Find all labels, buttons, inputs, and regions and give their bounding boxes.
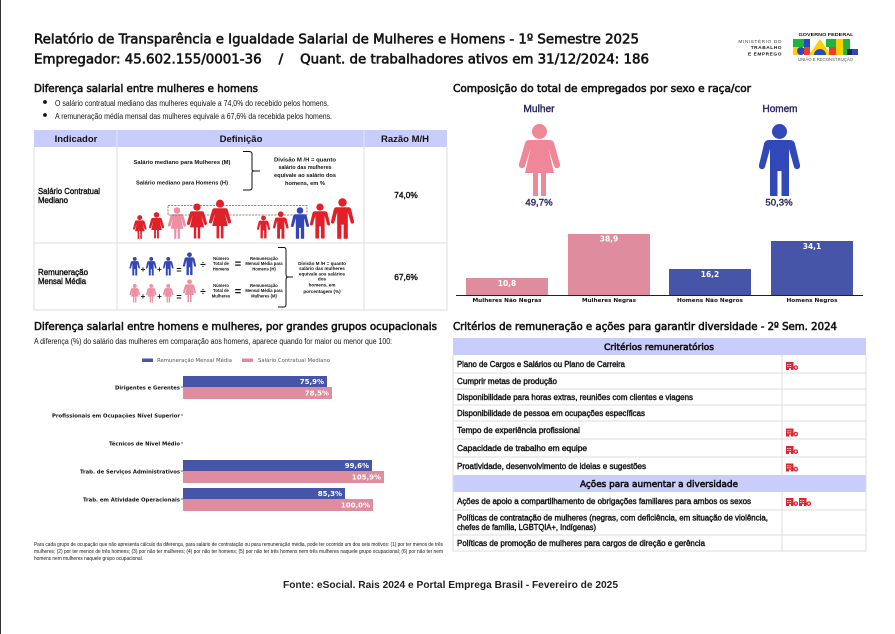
table: critérios e ações: Disponibilidade para horas extras, reuniões com clientes e viagens xyxy=(457,393,693,402)
table: critérios e ações: Políticas de contratação de mulheres (negras, com deficiência, em situação de violência, xyxy=(457,514,768,522)
icon: homem 50,3%: Homem xyxy=(762,104,798,115)
row: remuneração mensal média: homens, em xyxy=(309,282,335,288)
row: salário contratual mediano: 74,0% xyxy=(394,190,418,200)
bar chart: sexo e raça/cor: Mulheres Negras xyxy=(582,298,637,304)
logo: governo federal brasil: UNIÃO E RECONSTRUÇÃO xyxy=(798,57,854,62)
formula: homens: = xyxy=(235,258,241,270)
bar chart: grupos ocupacionais: Técnicos de Nível Médio xyxy=(109,440,180,448)
table: critérios e ações: Disponibilidade de pessoa em ocupações específicas xyxy=(457,409,645,418)
icon: mulher 49,7% xyxy=(519,104,560,208)
bullet list: O salário contratual mediano das mulheres equivale a 74,0% do recebido pelos homens. xyxy=(55,99,329,108)
bar chart: grupos ocupacionais: Trab. de Serviços Administrativos xyxy=(80,470,181,476)
heading: grupos ocupacionais: Diferença salarial entre homens e mulheres, por grandes grupos ocupacionais xyxy=(34,321,437,333)
table: critérios e ações: Proatividade, desenvolvimento de ideias e sugestões xyxy=(457,462,646,471)
row: remuneração mensal média: equivale aos salários xyxy=(299,272,346,276)
bar chart: grupos ocupacionais: 75,9% xyxy=(300,378,324,386)
bar chart: grupos ocupacionais: 85,3% xyxy=(318,490,342,498)
bar chart: sexo e raça/cor: Mulheres Não Negras xyxy=(472,298,542,304)
title: Empregador: 45.602.155/0001-36 / Quant. de trabalhadores ativos em 31/12/2024: 186 xyxy=(34,52,649,68)
bar chart: grupos ocupacionais: 78,5% xyxy=(305,390,329,398)
legend: Salário Contratual Mediano xyxy=(258,357,331,364)
row: salário contratual mediano: Salário mediano para Homens (H) xyxy=(136,180,228,186)
icons: marcadores de empresa xyxy=(786,362,810,506)
formula: mulheres xyxy=(129,279,283,302)
bar chart: grupos ocupacionais: Dirigentes e Gerentes xyxy=(115,386,181,392)
heading: critérios: Critérios de remuneração e ações para garantir diversidade - 2º Sem. 2024 xyxy=(453,321,837,333)
icon: homem 50,3% xyxy=(759,104,800,208)
bar chart: sexo e raça/cor: 38,9 xyxy=(600,234,618,244)
formula: mulheres: = xyxy=(176,292,182,302)
formula: mulheres: Remuneração xyxy=(250,283,278,288)
row: salário contratual mediano: homens, em % xyxy=(285,181,325,187)
bar chart: sexo e raça/cor: 16,2 xyxy=(701,270,719,279)
formula: homens: Total de xyxy=(213,261,230,266)
logo: ministério: MINISTÉRIO DO xyxy=(738,38,782,45)
bar chart: sexo e raça/cor: 34,1 xyxy=(803,242,821,251)
title: Relatório de Transparência e Igualdade Salarial de Mulheres e Homens - 1º Semestre 2025 xyxy=(34,32,639,48)
formula: homens: Homens (H) xyxy=(252,266,276,272)
row: remuneração mensal média: 67,6% xyxy=(394,272,418,282)
table: critérios e ações: Capacidade de trabalho em equipe xyxy=(457,444,588,453)
bullet list xyxy=(43,99,332,121)
formula: mulheres: Mulheres xyxy=(212,294,231,298)
formula: homens: Mensal Média para xyxy=(245,261,283,266)
table: critérios e ações: Cumprir metas de produção xyxy=(457,377,558,386)
table: indicadores xyxy=(34,130,447,310)
table: critérios e ações: Ações para aumentar a diversidade xyxy=(580,480,738,490)
row: remuneração mensal média: porcentagem (%) xyxy=(303,289,341,294)
footnote: mulheres; (2) por ter menos de três homens; (3) por não ter mulheres; (4) por não ter homens; (5) por não ter três homens nem três mulheres naquele grupo ocupacional; (6) por não ter nem xyxy=(34,549,443,555)
table: critérios e ações: Plano de Cargos e Salários ou Plano de Carreira xyxy=(457,360,626,369)
formula: mulheres: Mulheres (M) xyxy=(251,294,278,298)
footnote: homens nem mulheres naquele grupo ocupacional. xyxy=(34,556,143,562)
bar chart: sexo e raça/cor: Homens Não Negros xyxy=(677,298,744,304)
logo: governo federal brasil xyxy=(793,32,858,62)
row: salário contratual mediano: salário das mulheres xyxy=(278,165,332,171)
row: salário contratual mediano: Salário mediano para Mulheres (M) xyxy=(134,160,231,166)
title xyxy=(34,32,649,68)
heading: diferença salarial: Diferença salarial entre mulheres e homens xyxy=(34,83,258,95)
formula: homens: Homens xyxy=(213,266,230,272)
formula: homens xyxy=(129,252,283,275)
formula: mulheres: Total de xyxy=(213,288,230,293)
formula: mulheres: + xyxy=(141,292,146,301)
formula: homens: + xyxy=(157,265,162,274)
formula: homens: Remuneração xyxy=(250,256,278,261)
icon: mulher 49,7%: 49,7% xyxy=(525,198,553,208)
logo: ministério: TRABALHO xyxy=(751,45,782,51)
row: remuneração mensal média xyxy=(38,248,418,307)
icons: homens xyxy=(257,198,354,239)
bullet list: A remuneração média mensal das mulheres equivale a 67,6% da recebida pelos homens. xyxy=(55,112,332,121)
table: critérios e ações xyxy=(453,338,866,551)
legend xyxy=(142,357,331,364)
table: critérios e ações: Ações de apoio a compartilhamento de obrigações familiares para ambos os sexos xyxy=(457,497,751,506)
table: critérios e ações: Políticas de promoção de mulheres para cargos de direção e gerência xyxy=(457,539,706,548)
legend: Remuneração Mensal Média xyxy=(157,357,232,364)
row: salário contratual mediano: Salário Contratual xyxy=(38,186,100,196)
table: critérios e ações: chefes de família, LGBTQIA+, Indígenas) xyxy=(457,523,596,532)
row: remuneração mensal média: Divisão M /H = quanto xyxy=(298,261,346,266)
table: indicadores: Definição xyxy=(220,134,263,145)
table: critérios e ações: Tempo de experiência profissional xyxy=(457,426,580,435)
row: salário contratual mediano: Mediano xyxy=(38,195,68,205)
row: salário contratual mediano: equivale ao salário dos xyxy=(274,173,336,179)
icon: mulher 49,7%: Mulher xyxy=(523,104,555,115)
formula: homens: Número xyxy=(213,256,229,261)
logo: ministério: E EMPREGO xyxy=(748,52,782,58)
logo: ministério xyxy=(738,38,782,58)
heading: composição: Composição do total de empregados por sexo e raça/cor xyxy=(453,83,752,95)
bar chart: grupos ocupacionais: Trab. em Atividade Operacionais xyxy=(83,498,181,504)
logo: governo federal brasil: GOVERNO FEDERAL xyxy=(798,32,854,37)
bar chart: grupos ocupacionais: 105,9% xyxy=(352,474,381,482)
row: salário contratual mediano: Divisão M /H = quanto xyxy=(274,158,337,164)
bar chart: grupos ocupacionais: 99,6% xyxy=(345,462,369,470)
row: remuneração mensal média: Remuneração xyxy=(38,267,88,277)
icon: homem 50,3%: 50,3% xyxy=(765,198,793,208)
row: salário contratual mediano xyxy=(38,152,418,239)
icons: mulheres xyxy=(133,200,231,239)
table: critérios e ações: Critérios remuneratórios xyxy=(604,342,714,353)
bar chart: sexo e raça/cor xyxy=(456,234,863,304)
bar chart: grupos ocupacionais: Profissionais em Ocupações Nível Superior xyxy=(52,412,180,420)
formula: mulheres: ÷ xyxy=(200,287,206,298)
subtitle: grupos ocupacionais: A diferença (%) do salário das mulheres em comparação aos homens, aparece quando for maior ou menor que 100: xyxy=(34,337,392,346)
bar chart: sexo e raça/cor: 10,8 xyxy=(498,279,516,288)
formula: mulheres: + xyxy=(157,292,162,301)
row: remuneração mensal média: Mensal Média xyxy=(38,276,86,286)
footnote xyxy=(34,542,443,562)
formula: homens: + xyxy=(141,265,146,274)
formula: homens: ÷ xyxy=(200,260,206,271)
row: remuneração mensal média: salário das mulheres xyxy=(299,266,345,271)
formula: homens: = xyxy=(176,265,182,275)
bar chart: grupos ocupacionais: 100,0% xyxy=(341,502,370,510)
row: remuneração mensal média: dos xyxy=(318,276,327,282)
formula: mulheres: = xyxy=(235,286,241,298)
source note: Fonte: eSocial. Rais 2024 e Portal Emprega Brasil - Fevereiro de 2025 xyxy=(283,580,618,591)
table: indicadores: Razão M/H xyxy=(381,134,429,145)
footnote: Para cada grupo de ocupação que não apresenta cálculo da diferença, para salário de contratação ou para remuneração média, pode ter ocorrido um dos seis motivos: (1) por ter menos de três xyxy=(34,542,443,548)
formula: mulheres: Número xyxy=(213,283,229,288)
table: indicadores: Indicador xyxy=(55,134,98,145)
bar chart: grupos ocupacionais xyxy=(52,376,384,511)
formula: mulheres: Mensal Média para xyxy=(245,288,283,293)
bar chart: sexo e raça/cor: Homens Negros xyxy=(786,298,838,304)
